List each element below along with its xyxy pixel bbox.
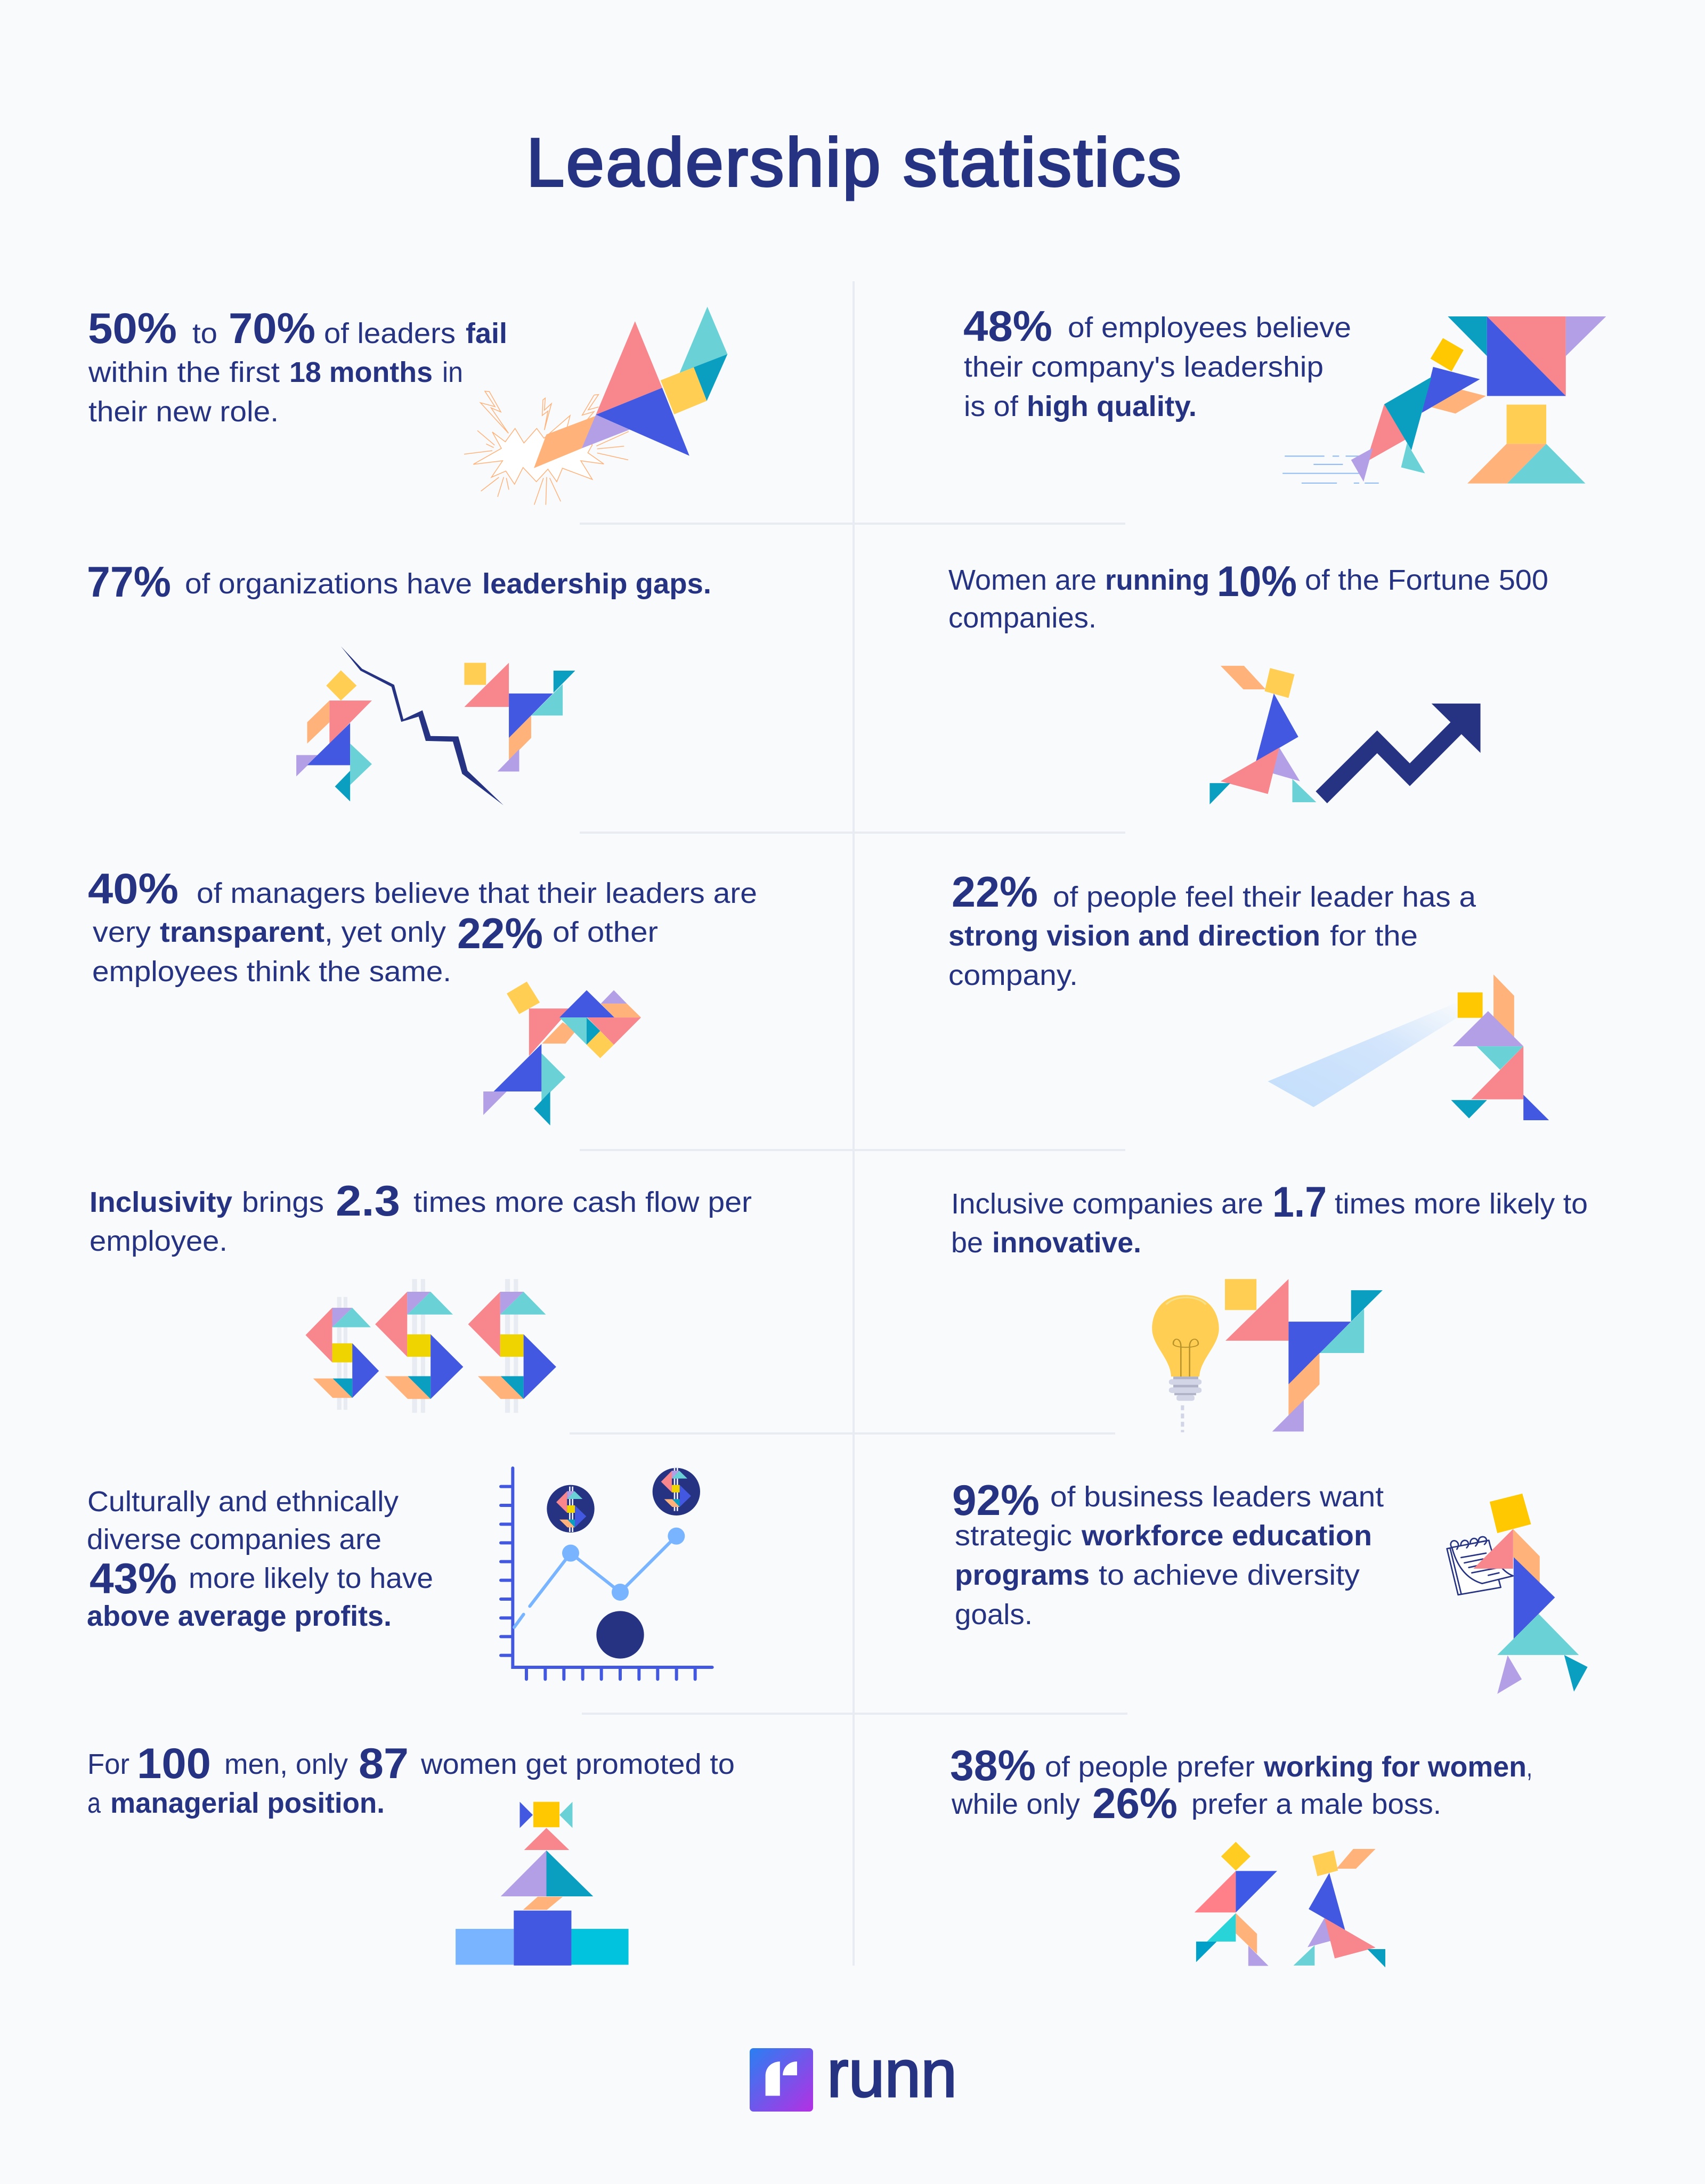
stat text: women vs male boss: of people prefer	[1045, 1751, 1255, 1783]
illustration: tangram rocket crash with burst	[464, 307, 727, 505]
panel: 100 men, 87 women	[87, 1740, 735, 1966]
stat text: 43% more likely	[87, 1486, 433, 1632]
stat text: leadership quality: their company's leadership	[964, 351, 1324, 383]
stat text: transparency: transparent	[160, 916, 324, 948]
icon: lightbulb	[1152, 1295, 1219, 1432]
stat text: women vs male boss: 26%	[1092, 1780, 1178, 1828]
coin: dollar two	[653, 1466, 700, 1515]
stat text: Fortune 500	[948, 558, 1548, 634]
stat text: transparency: of other	[553, 916, 658, 948]
illustration: tangram figure leaping	[483, 982, 641, 1126]
wordmark: runn	[827, 2036, 957, 2111]
stat text: 2.3 times more cash flow: employee.	[90, 1225, 228, 1257]
stat text: workforce education: workforce education	[1081, 1520, 1372, 1552]
stat text: strong vision: strong vision and direction	[948, 920, 1320, 952]
stat text: 1.7 times more likely	[951, 1178, 1588, 1259]
stat text: transparency: 22%	[457, 910, 543, 958]
stat text: workforce education: 92%	[952, 1477, 1040, 1525]
panel: 92% of business leaders	[952, 1477, 1588, 1694]
panel: 22% of people	[948, 868, 1549, 1120]
stat text: strong vision: 22%	[952, 868, 1038, 916]
logo: runn	[750, 2036, 957, 2112]
stat text: leaders fail: in	[442, 356, 463, 388]
stat text: leaders fail: of leaders	[324, 317, 456, 349]
stat text: women vs male boss: 38%	[950, 1742, 1036, 1790]
stat text: leadership quality	[963, 303, 1351, 422]
chart axes	[501, 1468, 712, 1679]
panel: women running 10%	[948, 558, 1548, 804]
stat text: leaders fail: their new role.	[88, 396, 279, 428]
stat text: managerial promotion: a	[87, 1787, 101, 1819]
stat text: leaders fail: 18 months	[289, 356, 433, 388]
icon: small dollar	[305, 1297, 379, 1410]
stat text: workforce education: goals.	[955, 1599, 1033, 1631]
stat text: 1.7 times more likely: be	[951, 1227, 983, 1259]
panel: 38% prefer working for women	[950, 1742, 1532, 1967]
stat text: managerial promotion: 100	[137, 1740, 211, 1788]
stat text: strong vision: of people feel their leader has a	[1053, 881, 1476, 913]
stat text: 43% more likely: more likely to have	[189, 1562, 433, 1594]
stat text: workforce education	[952, 1477, 1384, 1631]
stat text: women vs male boss	[950, 1742, 1532, 1828]
stat text: managerial promotion: 87	[359, 1740, 409, 1788]
stat text: transparency: , yet only	[324, 916, 446, 948]
figure	[1473, 1494, 1588, 1694]
stat text: strong vision: for the	[1330, 920, 1418, 952]
stat text: 2.3 times more cash flow: times more cash flow per	[413, 1186, 752, 1218]
stat text: 2.3 times more cash flow: 2.3	[336, 1177, 400, 1225]
icon: notebook	[1447, 1537, 1513, 1595]
illustration: tangram figure with vision beam	[1268, 974, 1549, 1120]
illustration: tangram woman with rising arrow	[1209, 666, 1481, 804]
coin: dollar one	[547, 1485, 595, 1533]
stat text: leadership quality: high quality.	[1027, 390, 1197, 422]
stat text: 2.3 times more cash flow: brings	[242, 1186, 324, 1218]
chart: line chart with coins	[501, 1466, 712, 1679]
stat text: transparency	[88, 865, 757, 988]
stat text: 1.7 times more likely: innovative.	[992, 1227, 1141, 1259]
stat text: transparency: employees think the same.	[92, 956, 451, 988]
stat text: strong vision: company.	[948, 959, 1078, 991]
stat text: 43% more likely: Culturally and ethnically	[87, 1486, 399, 1518]
stat text: leaders fail: to	[192, 317, 217, 349]
stat text: managerial promotion: For	[87, 1748, 129, 1780]
stat text: 2.3 times more cash flow	[90, 1177, 752, 1257]
stat text: managerial promotion	[87, 1740, 735, 1819]
stat text: 1.7 times more likely: Inclusive companies are	[951, 1188, 1263, 1220]
stat text: workforce education: to achieve diversity	[1099, 1559, 1360, 1591]
stat text: Fortune 500: 10%	[1217, 558, 1297, 606]
panel: 40% of managers	[88, 865, 757, 1126]
title: Leadership statistics	[526, 125, 1181, 201]
illustration: lightbulb and tangram figure	[1152, 1279, 1383, 1432]
stat text: Fortune 500: of the Fortune 500	[1305, 564, 1548, 596]
stat text: women vs male boss: while only	[951, 1788, 1080, 1820]
stat text: 1.7 times more likely: 1.7	[1272, 1178, 1327, 1226]
panel: 50% to 70% of leaders fail	[88, 305, 727, 505]
dark coin	[596, 1611, 644, 1659]
stat text: leadership gaps: of organizations have	[185, 568, 472, 600]
stat text: leadership gaps	[87, 558, 711, 606]
stat text: workforce education: programs	[955, 1559, 1090, 1591]
stat text: women vs male boss: ,	[1527, 1751, 1532, 1783]
rocket	[534, 307, 727, 468]
stat text: Fortune 500: running	[1105, 564, 1209, 596]
illustration: tangram figure on podium	[456, 1802, 629, 1966]
illustration: two tangram figures split by a crack	[296, 646, 575, 805]
illustration: tangram figure with notebook	[1447, 1494, 1588, 1694]
stat text: women vs male boss: working for women	[1263, 1751, 1527, 1783]
stat text: Fortune 500: Women are	[948, 564, 1097, 596]
stat text: leaders fail: 70%	[229, 305, 315, 353]
illustration: tangram man and woman	[1195, 1842, 1385, 1967]
icon: large dollar	[468, 1279, 556, 1413]
stat text: leadership quality: is of	[964, 390, 1019, 422]
illustration: three tangram dollar signs	[305, 1279, 556, 1413]
stat text: leadership gaps: leadership gaps.	[482, 568, 711, 600]
stat text: workforce education: strategic	[955, 1520, 1072, 1552]
stat text: 2.3 times more cash flow: Inclusivity	[90, 1186, 232, 1218]
stat text: leadership gaps: 77%	[87, 558, 171, 606]
panel: 48% of employees	[963, 303, 1606, 484]
panel: inclusivity cash flow	[90, 1177, 752, 1413]
panel: 77% of organizations	[87, 558, 711, 805]
stat text: leaders fail: fail	[466, 317, 507, 349]
stat text: Fortune 500: companies.	[948, 602, 1097, 634]
stat text: leaders fail	[88, 305, 507, 428]
stat text: managerial promotion: men, only	[224, 1748, 348, 1780]
icon: runn mark	[750, 2048, 813, 2112]
stat text: leaders fail: within the first	[88, 356, 280, 388]
stat text: women vs male boss: prefer a male boss.	[1191, 1788, 1441, 1820]
stat text: managerial promotion: women get promoted to	[420, 1748, 735, 1780]
stat text: workforce education: of business leaders want	[1050, 1481, 1384, 1513]
chart line	[514, 1528, 685, 1627]
panel: inclusive companies innovative	[951, 1178, 1588, 1432]
stat text: strong vision	[948, 868, 1476, 991]
stat text: 1.7 times more likely: times more likely to	[1335, 1188, 1588, 1220]
stat text: transparency: 40%	[88, 865, 178, 913]
stat text: 43% more likely: diverse companies are	[87, 1523, 381, 1555]
stat text: 43% more likely: above average profits.	[87, 1600, 392, 1632]
illustration: tangram runner with trophy	[1282, 316, 1606, 484]
stat text: transparency: very	[93, 916, 151, 948]
stat text: leadership quality: 48%	[963, 303, 1052, 351]
stat text: 43% more likely: 43%	[90, 1555, 177, 1603]
stat text: leadership quality: of employees believe	[1068, 312, 1351, 344]
burst	[464, 391, 629, 505]
panel: culturally diverse companies	[87, 1466, 712, 1679]
stat text: leaders fail: 50%	[88, 305, 177, 353]
icon: medium dollar	[375, 1279, 463, 1413]
stat text: transparency: of managers believe that their leaders are	[197, 877, 757, 909]
stat text: managerial promotion: managerial position.	[110, 1787, 385, 1819]
